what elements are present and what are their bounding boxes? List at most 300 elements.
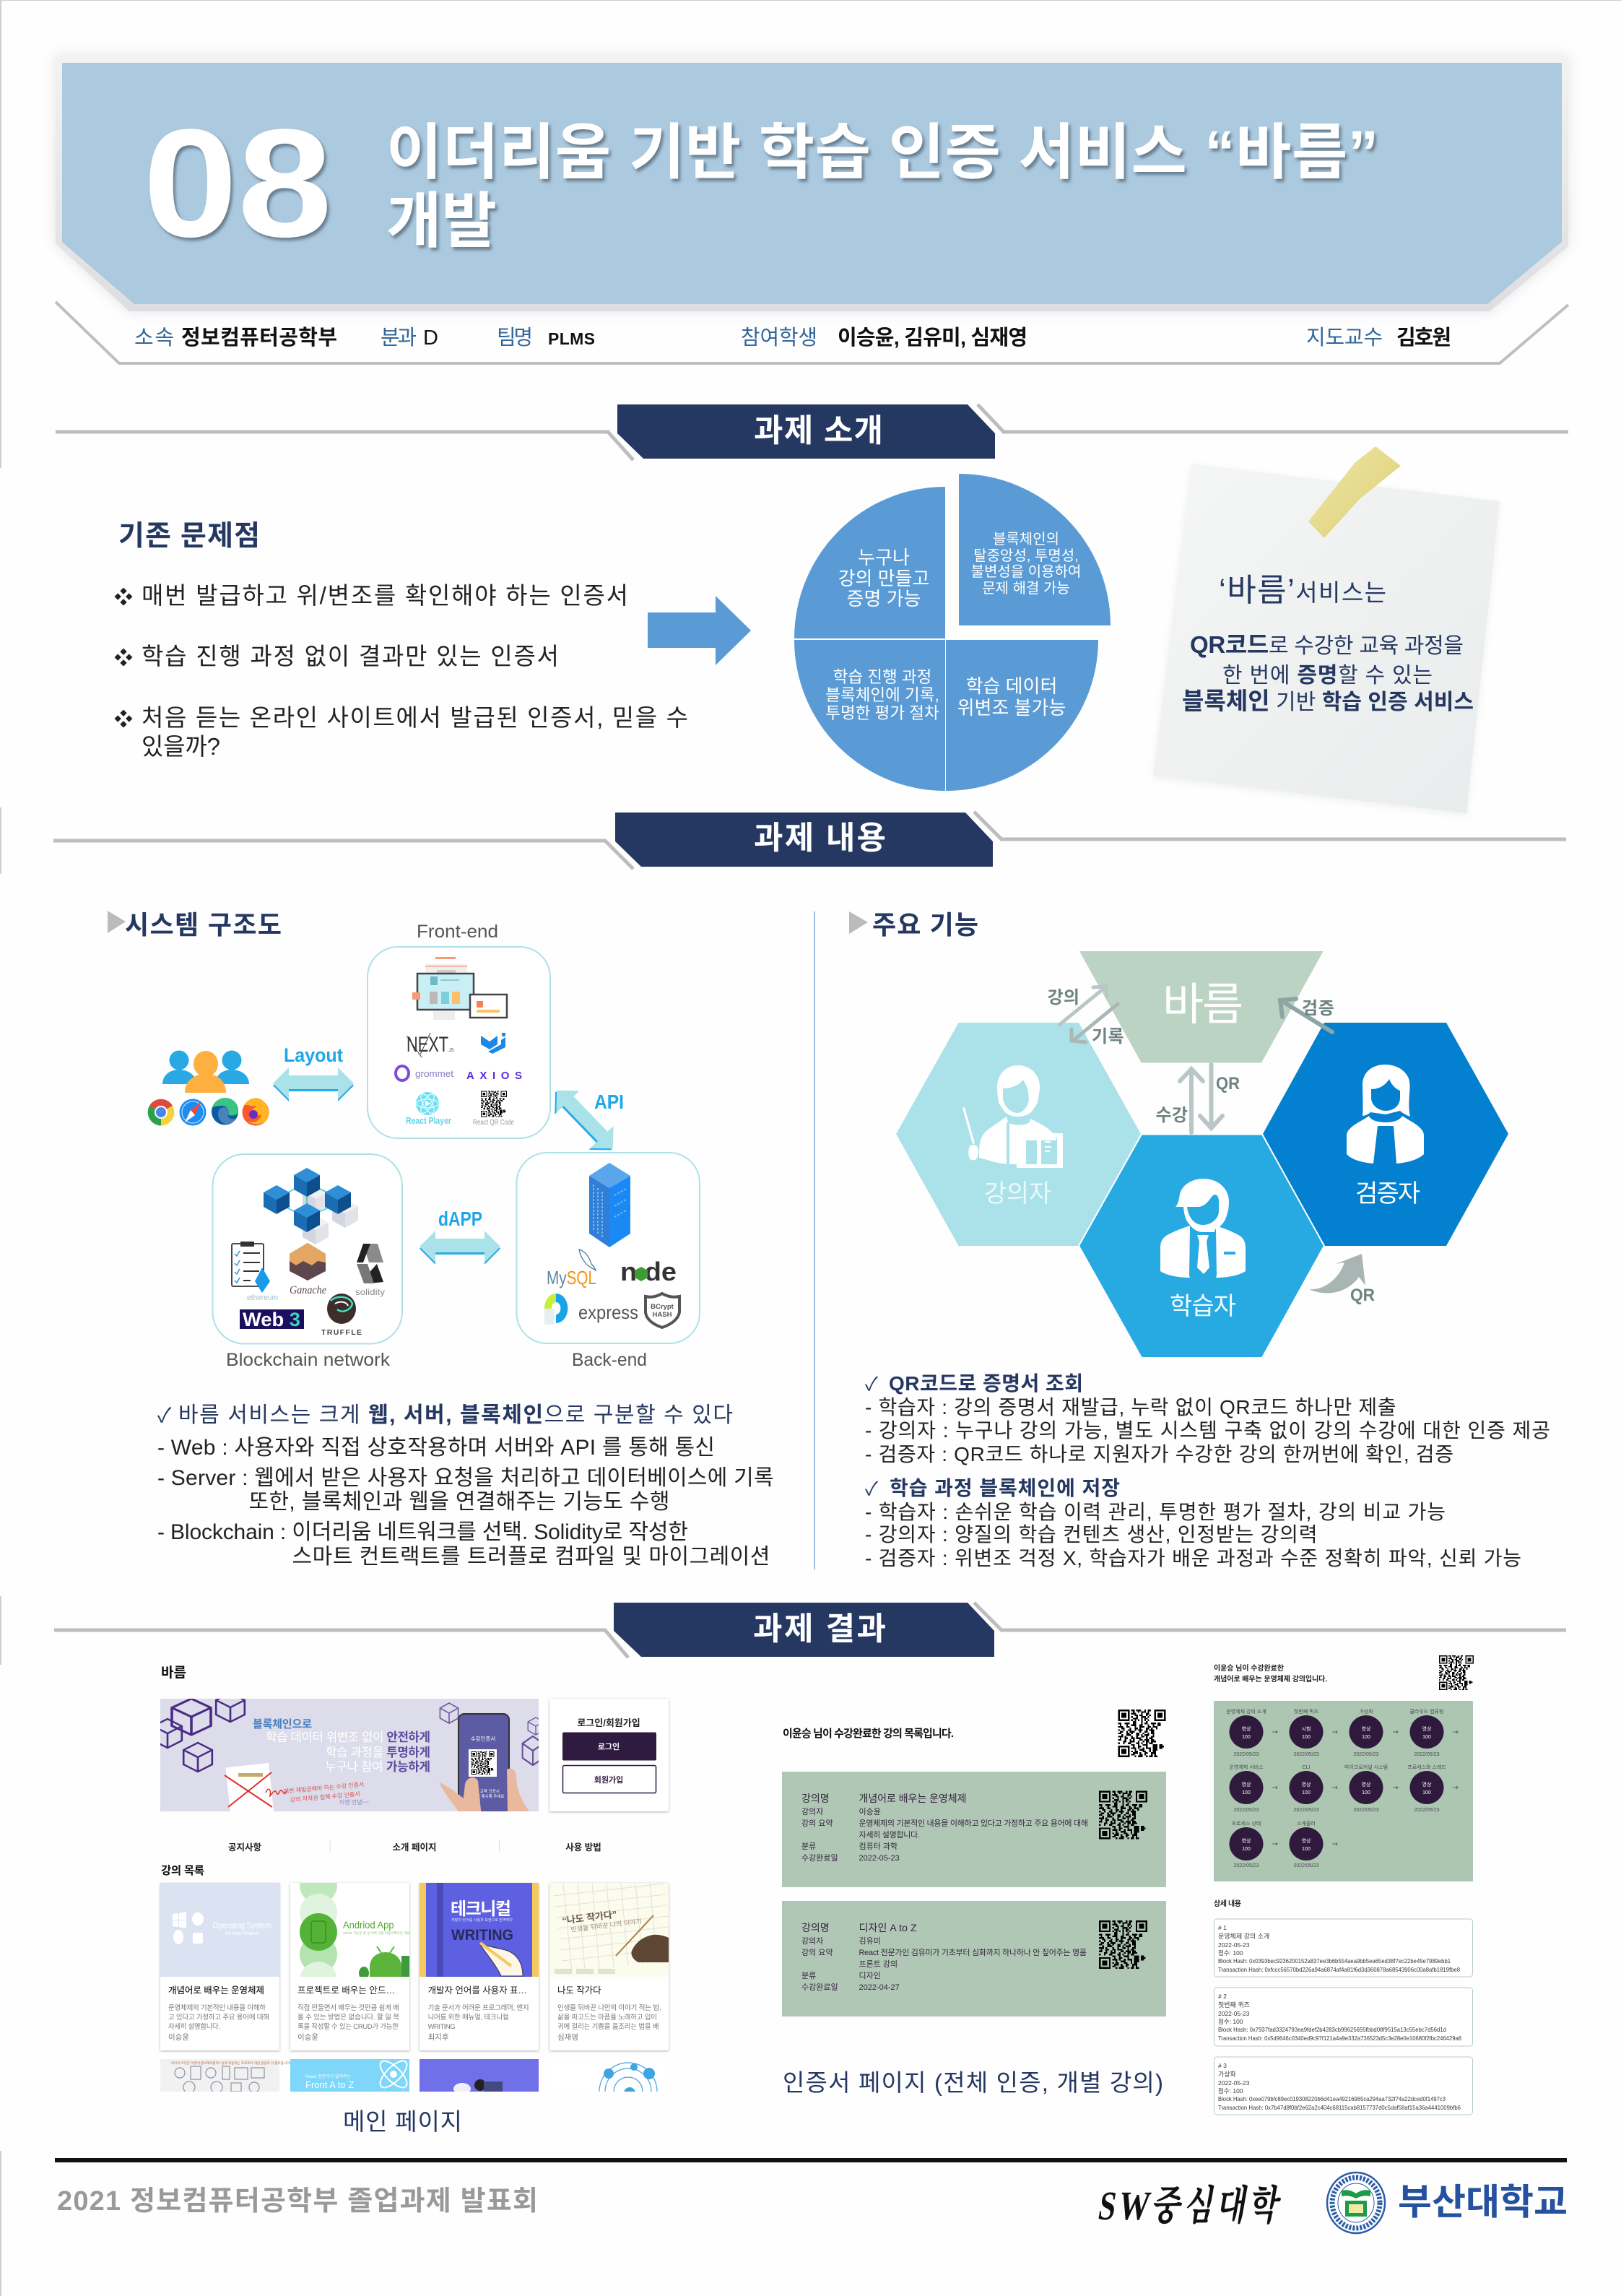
course cards row 2 [160,2059,658,2092]
progress board: 2022/05/23 [1233,1752,1259,1757]
info bar: 김호원 [1396,326,1451,350]
detail box 3: # 3 [1218,2062,1227,2069]
text block: feature description: 학습 과정 블록체인에 저장 [890,1477,1120,1499]
progress board: 시험 [1302,1726,1311,1732]
detail box 1: Transaction Hash: 0xfccc56570bd226a94a6874af4a81f6d3d360878a68543906c00a8afb1819fbe8 [1218,1966,1460,1973]
certificate card 2: 강의 요약 [801,1947,833,1957]
chart: solution pie: 학습 진행 과정 [833,668,931,686]
certificate card 2: 분류 [801,1971,816,1980]
panel: front-end: Front-end [417,922,498,942]
progress board: 100 [1242,1847,1251,1852]
section header: 과제 소개 [56,404,1568,460]
text block: feature description: - 검증자 : QR코드 하나로 지원자가 수강한 강의 한꺼번에 확인, 검증 [865,1443,1453,1465]
panel: back-end [517,1153,700,1370]
progress board: 영상 [1362,1781,1371,1788]
icon: node: n de [620,1257,677,1286]
course card 3: 니어를 위한 매뉴얼, 테크니컬 [428,2013,509,2022]
progress board: 2022/05/23 [1293,1808,1319,1813]
course cards row 2: 아이어 프딩은 어떻게 준비해야할까? 쉽게 적용하는 프로토타 개념 알림의 더 풀어봅니다! [171,2061,290,2066]
course card 4: “나도 작가다” [562,1909,617,1926]
relation labels: 검증 [1302,999,1334,1018]
problem list: 학습 진행 과정 없이 결과만 있는 인증서 [142,643,559,670]
title: 이더리움 기반 학습 인증 서비스 “바름” [386,118,1378,186]
text block: feature description: ✓ [865,1373,878,1395]
icon: ethereum checklist: ethereum [247,1294,278,1302]
progress board: CLI [1303,1765,1310,1770]
certificate card 1: 분류 [801,1842,816,1851]
icon: truffle: TRUFFLE [321,1328,362,1337]
heading: 기존 문제점 [118,521,260,552]
relation labels: 강의 [1048,988,1079,1008]
progress board: 2022/05/23 [1353,1752,1379,1757]
icon: bcrypt shield: HASH [653,1311,672,1319]
note text: QR코드로 수강한 교육 과정을 [1190,631,1464,658]
icon: next.js: NEXT [407,1033,448,1057]
panel: sticky note [1153,446,1500,813]
arrow: qr curved [1309,1254,1365,1293]
heading: 주요 기능 [872,910,978,940]
course cards row 2: React 전문가가 알려주는 [305,2074,352,2079]
progress board: 100 [1302,1790,1311,1795]
panel: title banner [56,56,1568,311]
text block: architecture description: 바름 서비스는 크게 웹, 서버, 블록체인으로 구분할 수 있다 [178,1403,733,1427]
course card 4: 삶을 파고드는 아픔을 노래하고 입이 [557,2013,657,2022]
course card 2: 프로젝트로 배우는 안드… [297,1985,395,1996]
text block: feature description: - 학습자 : 손쉬운 학습 이력 관리, 투명한 평가 절차, 강의 비교 가능 [865,1501,1446,1523]
text block: architecture description: 스마트 컨트랙트를 트러플로 컴파일 및 마이그레이션 [292,1545,770,1569]
progress board: 첫번째 퀴즈 [1294,1708,1319,1715]
text block: feature description: - 강의자 : 누구나 강의 가능, 별도 시스템 구축 없이 강의 수강에 대한 인증 제공 [865,1419,1550,1442]
relation labels [1048,988,1375,1305]
certificate card 2: React 전문가인 김유미가 기초부터 심화까지 하나하나 안 짚어주는 명품 [859,1947,1087,1957]
detail box 2: Block Hash: 0x7937fad3324793ea9fdef2b4283cb99625655fbbd08f9515a13c55ebc7d56d1d [1218,2026,1446,2033]
icon: browsers [148,1098,269,1125]
promo banner: 블록체인으로 [253,1718,312,1730]
problem list: 매번 발급하고 위/변조를 확인해야 하는 인증서 [142,582,628,609]
icon: grommet: grommet [415,1068,453,1079]
arrow: record [1072,1004,1118,1042]
icon: web screens [412,957,507,1020]
text block: feature description: ✓ [865,1478,878,1499]
chart: solution pie: 불변성을 이용하여 [971,563,1081,580]
info bar: D [423,326,438,350]
logo: sw centered university: SW중심대학 [1095,2183,1284,2228]
logo: pusan national university [1327,2172,1568,2233]
icon: learner [1160,1179,1246,1278]
detail box 3: Transaction Hash: 0x7b47d8f0bf2e62a2c404c68115cab8157737d0c5daf58af15a36a4441009bfb6 [1218,2104,1461,2111]
course card 2: 록을 작성할 수 있는 CRUD가 가능한 [297,2022,399,2031]
panel: course detail certificate [1214,1655,1474,2115]
detail box 1: # 1 [1218,1924,1227,1931]
arrow: problems to solution [648,596,751,665]
promo banner: 누구나 참여 가능하게 [325,1760,430,1774]
icon: bcrypt shield [646,1294,679,1327]
detail box 3 [1214,2057,1473,2115]
progress board: 프로세스 상태 [1232,1820,1261,1827]
certificate card 1: 강의 요약 [801,1818,833,1828]
hexagon: learner [1079,1134,1324,1358]
panel: key features [849,910,1550,1569]
icon: ganache: Ganache [290,1284,326,1296]
course card 1: 고 있다고 가정하고 주요 용어에 대해 [168,2013,269,2022]
icon: mysql [547,1249,596,1288]
info bar [56,302,1568,363]
certificate card 1: 자세히 설명합니다. [859,1829,920,1840]
progress board: 운영체제 강의 소개 [1226,1708,1266,1715]
arrow: dapp [420,1208,500,1265]
icon: axios: AXIOS [466,1070,522,1082]
caption: 메인 페이지 [343,2108,462,2135]
panel: blockchain network [212,1154,402,1370]
course card 1: 자세히 설명합니다. [168,2023,220,2031]
footer [55,2158,1568,2233]
hexagon: verifier [1263,1023,1508,1246]
course card 4: 귀에 걸리는 기쁨을 읊조리는 법을 배 [557,2022,659,2031]
icon: tape [1308,446,1401,538]
section header: 과제 내용 [53,812,1566,869]
icon: prisma [544,1294,568,1325]
certificate card 1: 강의자 [801,1807,823,1816]
section header: 과제 소개: 과제 소개 [754,413,883,449]
course card 2: 직접 만들면서 배우는 것만큼 쉽게 배 [297,2003,399,2012]
chart: solution pie: 블록체인에 기록, [825,686,939,704]
title: 개발 [386,187,497,255]
promo banner: QR코드를 제시해 주세요 [464,1793,504,1799]
icon: bcrypt shield: BCrypt [651,1303,674,1311]
progress board: 2022/05/23 [1414,1752,1440,1757]
promo banner: 강의 저작권 침해 수강 인증서 [290,1790,360,1803]
progress board: 2022/05/23 [1233,1863,1259,1868]
progress board: 영상 [1302,1781,1311,1788]
navigation tabs: 공지사항 [228,1842,261,1853]
text block: feature description: QR코드로 증명서 조회 [889,1372,1083,1395]
icon: verifier [1347,1065,1424,1164]
icon: truffle [321,1294,362,1337]
certificate card 2: 디자인 [859,1971,881,1980]
icon: lecturer [962,1065,1063,1168]
info bar: 소속 [134,326,174,350]
text block: feature description [865,1372,1550,1569]
icon: overall qr [1118,1710,1165,1757]
detail box 3: 가상화 [1218,2071,1236,2078]
arrows: relations [1059,987,1332,1132]
panel: course detail certificate: 이윤승 님이 수강완료한 [1214,1663,1284,1673]
hexagon: learner: 학습자 [1170,1293,1236,1320]
progress board: 100 [1422,1790,1431,1795]
course card 4 [549,1883,669,2050]
info bar: PLMS [548,329,595,348]
course card 2: 울 수 있는 방법은 없습니다. 할 일 목 [297,2013,399,2022]
text block: architecture description: - Blockchain : 이더리움 네트워크를 선택. Solidity로 작성한 [157,1520,688,1544]
detail box 2: 첫번째 퀴즈 [1218,2001,1250,2009]
progress board: 영상 [1362,1725,1371,1732]
panel: certificate page: 이윤승 님이 수강완료한 강의 목록입니다. [783,1728,954,1740]
problem list: 처음 듣는 온라인 사이트에서 발급된 인증서, 믿을 수 [142,704,688,731]
certificate card 1: 컴퓨터 과학 [859,1842,898,1851]
progress board: 영상 [1302,1837,1311,1844]
course card 2: 이승윤 [297,2033,318,2042]
course card 3: 최지후 [428,2033,449,2042]
detail box 1: 2022-05-23 [1218,1941,1250,1949]
problem list: ❖ [114,586,133,608]
certificate card 2: 프론트 강의 [859,1959,898,1969]
arrow: api [544,1079,625,1161]
course card 1: 개념어로 배우는 운영체제 [168,1985,264,1996]
progress board: 클라우드 컴퓨팅 [1409,1708,1444,1715]
info bar: 분과 [381,326,417,350]
progress board: 영상 [1422,1781,1432,1788]
course card 3 [420,1883,539,2050]
panel: main page screenshot [153,1665,669,2135]
panel: main page screenshot: 바름 [161,1665,186,1681]
navigation tabs: 사용 방법 [565,1842,601,1853]
arrow: verify [1280,999,1332,1032]
icon: material ui [481,1033,505,1054]
panel: blockchain network: Blockchain network [226,1350,391,1370]
promo banner: 학습 데이터 위변조 없이 안전하게 [266,1730,430,1744]
navigation tabs [228,1840,601,1853]
progress board: 영상 [1242,1837,1251,1844]
problem list: ❖ [114,709,133,730]
icon: qr [1439,1655,1474,1690]
relation labels: 수강 [1155,1106,1188,1125]
problem list: ❖ [114,647,133,669]
info bar: 참여학생 [741,326,817,350]
login card: 회원가입 [594,1775,623,1785]
progress board: 2022/05/23 [1293,1752,1319,1757]
chart: solution pie: 증명 가능 [847,588,921,610]
note text [1182,573,1474,714]
course card 1: for Non-Majors [225,1931,259,1936]
icon: next.js: .JS [448,1049,454,1053]
icon: react qr code: React QR Code [473,1118,514,1127]
detail box 1: 점수: 100 [1218,1949,1243,1957]
info bar: 지도교수 [1306,326,1383,350]
course card 3: 개발자 언어를 사용자 표… [428,1985,527,1996]
icon: ethereum checklist [232,1242,278,1302]
panel: course detail certificate: 개념어로 배우는 운영체제 강의입니다. [1214,1674,1327,1684]
relation labels: QR [1350,1286,1375,1305]
certificate card 2: 수강완료일 [801,1982,838,1992]
chart: solution pie [794,474,1111,791]
chart: solution pie: 투명한 평가 절차 [825,704,939,722]
login card [549,1699,669,1811]
arrow: api: API [594,1091,624,1113]
arrow: enrol [1180,1069,1203,1132]
course card 4: 인생을 뒤바꾼 나만의 이야기 적는 법, [557,2003,661,2012]
detail box 1 [1214,1919,1473,1977]
course card 4: 나도 작가다 [557,1985,601,1996]
chart: solution pie: 탈중앙성, 투명성, [973,547,1079,564]
detail box 2: Transaction Hash: 0x5d9646c0340ed9c97f121a4a9e332a736523d5c3e28e0e10680f2fbc246429a8 [1218,2035,1461,2042]
icon: react qr code [473,1091,514,1127]
chart: solution pie: 강의 만들고 [838,568,929,589]
course card 2 [290,1866,409,2050]
heading: 시스템 구조도 [125,910,282,940]
certificate card 1: 운영체제의 기본적인 내용을 이해하고 있다고 가정하고 주요 용어에 대해 [859,1818,1088,1828]
progress board: 프로세스와 스레드 [1407,1764,1446,1770]
icon: users [162,1050,249,1093]
icon: react player: React Player [406,1116,451,1126]
icon: block cubes [264,1168,358,1244]
certificate card 2: 강의자 [801,1936,823,1946]
arrow: layout: Layout [284,1044,343,1066]
icon: ganache [290,1243,326,1296]
promo banner: 이젠 안녕~~ [339,1798,369,1806]
course card 2: CRUD 가능한 할 일 목록 직접 어플리케이션 개발 [343,1931,409,1936]
panel: back-end: Back-end [572,1350,647,1370]
course card 1 [160,1883,279,2050]
progress board: 영상 [1242,1781,1251,1788]
project number: 08 [143,98,332,269]
detail box 2 [1214,1988,1473,2046]
progress board: 가상화 [1359,1708,1373,1715]
icon: mysql: MySQL [547,1267,596,1288]
problem list: 있을까? [142,733,220,760]
progress board: 운영체제 서비스 [1229,1764,1264,1770]
certificate card 1: 이승윤 [859,1807,881,1816]
icon: solidity: solidity [355,1287,385,1297]
chart: solution pie: 블록체인의 [993,531,1059,547]
note text: 한 번에 증명할 수 있는 [1222,664,1433,688]
navigation tabs: 소개 페이지 [393,1842,436,1853]
course card 1: 운영체제의 기본적인 내용을 이해하 [168,2003,266,2012]
info bar: 정보컴퓨터공학부 [181,326,337,350]
panel: existing problems [114,521,688,760]
icon: solidity [355,1244,385,1297]
course card 1: 이승윤 [168,2033,189,2042]
arrow: dapp: dAPP [438,1208,482,1230]
section header: 과제 내용: 과제 내용 [754,820,886,856]
course card 3: 테크니컬 [451,1899,511,1919]
progress board: 100 [1422,1735,1431,1740]
detail box 2: 점수: 100 [1218,2018,1243,2025]
certificate card 2 [782,1901,1166,2016]
arrow: layout [273,1044,354,1101]
logo: pusan national university: 부산대학교 [1398,2182,1568,2222]
chart: solution pie: 누구나 [858,547,910,568]
course cards row 2: Front A to Z [305,2079,354,2090]
hexagon: lecturer: 강의자 [984,1180,1051,1208]
login card: 로그인/회원가입 [577,1717,640,1728]
footer text: 2021 정보컴퓨터공학부 졸업과제 발표회 [57,2186,538,2217]
progress board: 영상 [1242,1725,1251,1732]
icon: react player [406,1092,451,1126]
text block: feature description: - 학습자 : 강의 증명서 재발급, 누락 없이 QR코드 하나만 제출 [865,1396,1396,1418]
info bar: 팀명 [497,326,533,350]
promo banner: 수강한 교육 인증시 [468,1789,500,1794]
chart: solution pie: 위변조 불가능 [957,697,1066,719]
panel: certificate page [782,1710,1166,2096]
panel: main page screenshot: 강의 목록 [161,1864,204,1877]
certificate card 1: 개념어로 배우는 운영체제 [859,1793,966,1804]
certificate card 2: 2022-04-27 [859,1983,900,1992]
progress board: 100 [1362,1735,1370,1740]
icon: grommet [396,1066,453,1080]
panel: course detail certificate: 상세 내용 [1214,1899,1241,1908]
text block: architecture description: - Server : 웹에서 받은 사용자 요청을 처리하고 데이터베이스에 기록 [157,1466,774,1490]
course card 3: WRITING [428,2023,456,2031]
progress board: 100 [1242,1735,1251,1740]
text block: feature description: - 검증자 : 위변조 걱정 X, 학습자가 배운 과정과 수준 정확히 파악, 신뢰 가능 [865,1547,1521,1569]
course card 3: 개발자 언어를 사용자 표현으로 번역하다 [451,1918,513,1923]
certificate card 1: 2022-05-23 [859,1854,900,1863]
progress board: 2022/05/23 [1414,1808,1440,1813]
relation labels: 기록 [1092,1027,1124,1047]
chart: solution pie: 학습 데이터 [966,675,1057,697]
course card 4: 인생을 뒤바꾼 나의 이야기 [570,1917,642,1933]
course card 3: 기술 문서가 어려운 프로그래머, 엔지 [428,2003,529,2012]
hexagon: lecturer [896,1023,1141,1246]
note text: ‘바름’서비스는 [1219,573,1386,608]
panel: front-end [368,922,550,1138]
section header: 과제 결과: 과제 결과 [753,1611,886,1647]
note text: 블록체인 기반 학습 인증 서비스 [1182,688,1474,714]
detail box 3: 2022-05-23 [1218,2079,1250,2087]
hexagon: verifier: 검증자 [1355,1180,1420,1208]
text block: architecture description [157,1403,774,1569]
progress board: 2022/05/23 [1293,1863,1319,1868]
info bar: 이승윤, 김유미, 심재영 [838,326,1027,350]
promo banner [160,1699,539,1811]
progress board: 100 [1362,1790,1370,1795]
course card 1: Operating System [212,1922,271,1931]
arrow: lecture [1059,987,1107,1025]
problem list [114,582,688,760]
progress board: 2022/05/23 [1353,1808,1379,1813]
promo banner: 수강인증서 [471,1735,495,1742]
course card 4: 심재영 [557,2033,578,2042]
certificate card 2: 디자인 A to Z [859,1922,917,1933]
progress board: 마이크로커널 시스템 [1344,1764,1388,1770]
detail box 1: 운영체제 강의 소개 [1218,1933,1269,1940]
text block: architecture description: - Web : 사용자와 직접 상호작용하며 서버와 API 를 통해 통신 [157,1436,715,1460]
detail box 2: 2022-05-23 [1218,2010,1250,2017]
promo banner: 매번 재발급해야 하는 수강 인증서 [283,1780,365,1795]
text block: architecture description: ✓ [157,1404,172,1426]
panel: back-end: express [578,1301,638,1323]
certificate card 1: 수강완료일 [801,1853,838,1863]
progress board: 100 [1302,1735,1311,1740]
text block: architecture description: 또한, 블록체인과 웹을 연결해주는 기능도 수행 [248,1490,670,1514]
progress board [1214,1701,1473,1881]
certificate card 1: 강의명 [801,1793,830,1804]
section header: 과제 결과 [54,1603,1566,1658]
progress board: 스케줄러 [1297,1820,1316,1827]
icon: web3: Web 3 [243,1309,300,1330]
course card 2: Andriod App [343,1919,394,1931]
service trapezoid [1079,951,1324,1063]
certificate card 2: 강의명 [801,1922,830,1933]
detail box 2: # 2 [1218,1993,1227,2000]
progress board: 100 [1302,1847,1311,1852]
detail box 3: Block Hash: 0xee079bfc89ec019308220b6d41ea49216965ca294aa732f74a22dced0f1497c3 [1218,2095,1446,2102]
certificate card 1 [782,1772,1166,1887]
text block: feature description: - 강의자 : 양질의 학습 컨텐츠 생산, 인정받는 강의력 [865,1523,1317,1546]
promo banner: 학습 과정을 투명하게 [326,1746,430,1759]
icon: server [589,1163,630,1247]
login card: 로그인 [598,1742,620,1751]
relation labels: QR [1216,1074,1240,1093]
progress board: 100 [1242,1790,1251,1795]
service trapezoid: 바름 [1162,980,1243,1030]
course card 3: WRITING [451,1927,513,1944]
progress board: 2022/05/23 [1233,1808,1259,1813]
caption: 인증서 페이지 (전체 인증, 개별 강의) [783,2069,1163,2096]
chart: solution pie: 문제 해결 가능 [982,580,1070,597]
arrow: qr down [1200,1065,1222,1128]
title [386,118,1378,255]
